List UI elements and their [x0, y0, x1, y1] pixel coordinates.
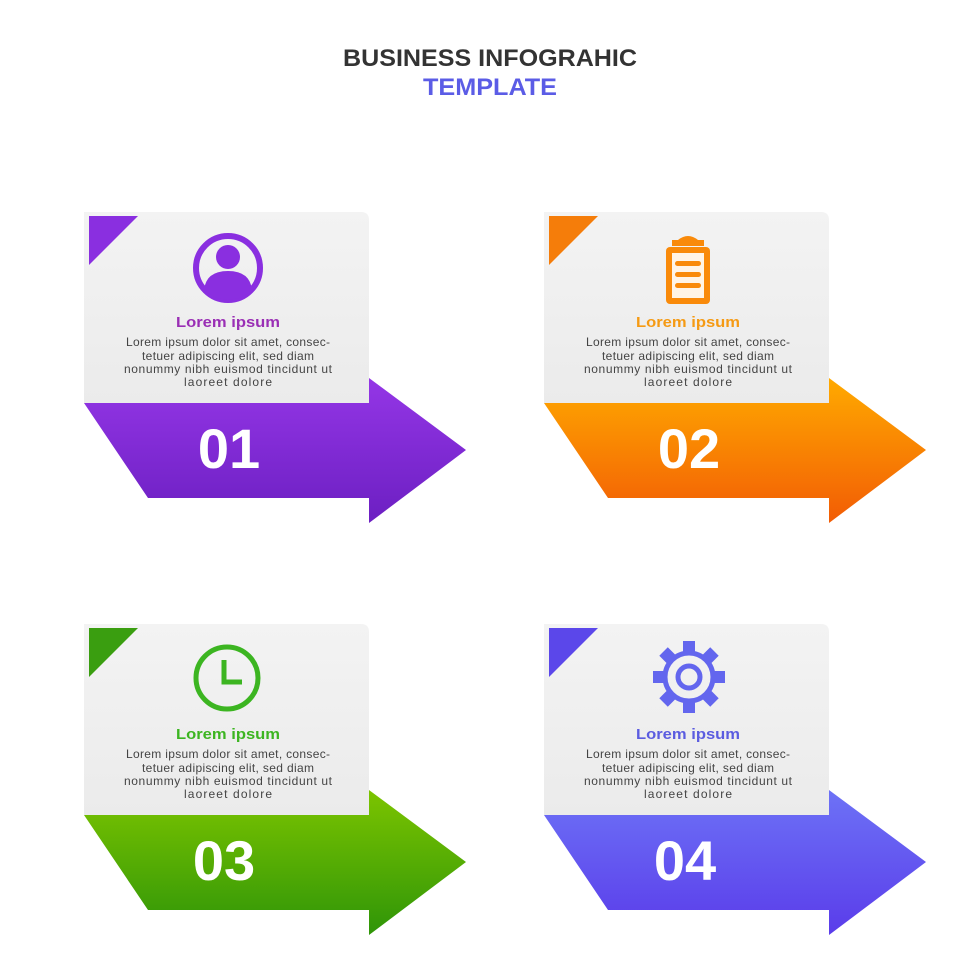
card 02 — [544, 212, 829, 403]
panel: step 01 — [84, 212, 466, 523]
arrow 01 — [84, 378, 466, 523]
number 03: 03 — [193, 829, 255, 892]
corner 02 — [549, 216, 598, 265]
text 03: tetuer adipiscing elit, sed diam — [142, 761, 314, 775]
text 01: laoreet dolore — [184, 375, 272, 389]
title — [343, 45, 637, 101]
text 01: tetuer adipiscing elit, sed diam — [142, 349, 314, 363]
icon: clipboard — [666, 236, 710, 304]
text 04: tetuer adipiscing elit, sed diam — [602, 761, 774, 775]
heading 01: Lorem ipsum — [176, 314, 280, 331]
heading 04: Lorem ipsum — [636, 726, 740, 743]
corner 01 — [89, 216, 138, 265]
panel: step 03 — [84, 624, 466, 935]
icon: gear — [653, 641, 725, 713]
text 04: Lorem ipsum dolor sit amet, consec- — [586, 747, 790, 761]
card 01 — [84, 212, 369, 403]
icon: person — [196, 236, 260, 300]
card 04 — [544, 624, 829, 815]
text 02: nonummy nibh euismod tincidunt ut — [584, 362, 793, 376]
corner 04 — [549, 628, 598, 677]
text 01: Lorem ipsum dolor sit amet, consec- — [126, 335, 330, 349]
text 02: laoreet dolore — [644, 375, 732, 389]
arrow 03 — [84, 790, 466, 935]
text 03: Lorem ipsum dolor sit amet, consec- — [126, 747, 330, 761]
panel: step 02 — [544, 212, 926, 523]
text 04: nonummy nibh euismod tincidunt ut — [584, 774, 793, 788]
number 04: 04 — [654, 829, 716, 892]
number 02: 02 — [658, 417, 720, 480]
text 03: nonummy nibh euismod tincidunt ut — [124, 774, 333, 788]
corner 03 — [89, 628, 138, 677]
text 02: tetuer adipiscing elit, sed diam — [602, 349, 774, 363]
title: BUSINESS INFOGRAHIC — [343, 45, 637, 72]
title: TEMPLATE — [423, 74, 557, 101]
arrow 02 — [544, 378, 926, 523]
icon: clock — [196, 647, 258, 709]
heading 02: Lorem ipsum — [636, 314, 740, 331]
number 01: 01 — [198, 417, 260, 480]
text 03: laoreet dolore — [184, 787, 272, 801]
text 01: nonummy nibh euismod tincidunt ut — [124, 362, 333, 376]
arrow 04 — [544, 790, 926, 935]
heading 03: Lorem ipsum — [176, 726, 280, 743]
card 03 — [84, 624, 369, 815]
text 02: Lorem ipsum dolor sit amet, consec- — [586, 335, 790, 349]
panel: step 04 — [544, 624, 926, 935]
text 04: laoreet dolore — [644, 787, 732, 801]
